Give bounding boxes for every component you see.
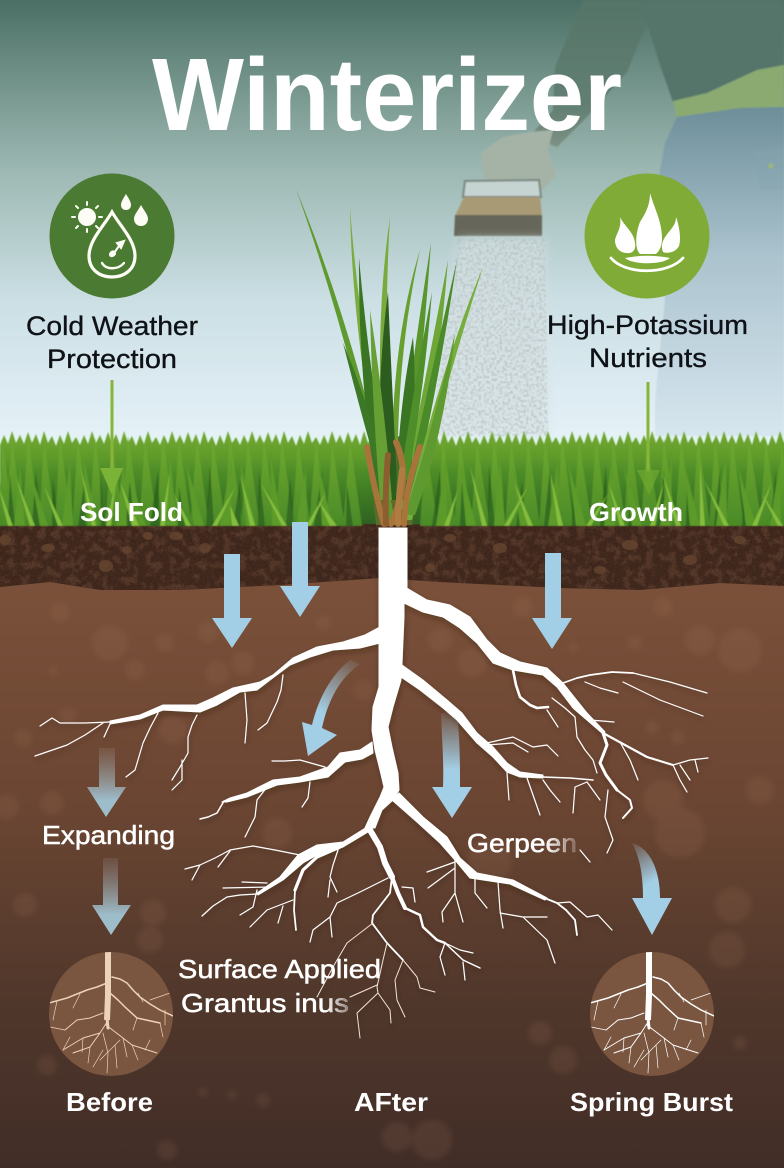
farmer waistband xyxy=(673,65,784,118)
lawn grass xyxy=(0,431,784,526)
label: cold weather protection: Protection xyxy=(47,344,177,374)
arrow: lower right xyxy=(632,843,672,935)
label: surface applied granules: Grantus inus xyxy=(181,988,349,1018)
sky background xyxy=(0,0,784,530)
icon: high-potassium nutrients xyxy=(584,174,710,298)
before root circle xyxy=(49,952,173,1076)
label: gerpeen: Gerpeen xyxy=(467,828,577,858)
soil blotches xyxy=(0,597,774,1160)
fine roots xyxy=(35,673,708,980)
plant base stems xyxy=(368,436,425,525)
label: high-potassium nutrients: Nutrients xyxy=(589,343,707,373)
farmer trousers xyxy=(655,107,784,436)
label: high-potassium nutrients: High-Potassium xyxy=(547,310,748,340)
arrow: curved toward root xyxy=(302,660,360,756)
icon: small drops xyxy=(121,194,148,226)
icon: sprout and smile xyxy=(102,241,124,268)
spreader hopper xyxy=(454,197,542,236)
icon: large water drop xyxy=(89,212,135,277)
medium branches xyxy=(370,830,392,877)
trouser pocket xyxy=(752,146,784,190)
arrow: faded left upper xyxy=(87,748,126,817)
green arrow: high-potassium nutrients xyxy=(637,382,660,495)
icon: bowl xyxy=(625,256,670,263)
spreader handle xyxy=(463,180,541,197)
farmer figure in background xyxy=(454,0,784,436)
root system xyxy=(35,528,708,1038)
arrow: topsoil left xyxy=(212,554,252,648)
icon: flames xyxy=(615,193,680,254)
topsoil layer xyxy=(0,520,784,590)
arrow: topsoil right xyxy=(532,553,572,649)
label: surface applied granules: Surface Applied xyxy=(178,954,381,984)
soil clods xyxy=(0,532,746,574)
label: expanding: Expanding xyxy=(42,820,175,850)
label: growth: Growth xyxy=(589,497,683,527)
arrow: faded left lower xyxy=(92,858,131,935)
farmer arm xyxy=(530,0,647,147)
farmer shirt xyxy=(640,0,784,102)
label: sol fold: Sol Fold xyxy=(80,497,183,527)
icon: sun xyxy=(72,202,102,232)
icon: cold weather protection xyxy=(50,174,174,298)
label: before: Before xyxy=(66,1087,153,1117)
granule spray xyxy=(428,238,549,436)
spring burst root circle xyxy=(590,952,714,1076)
green arrow: cold weather protection xyxy=(100,380,123,495)
plant blades xyxy=(296,189,396,525)
label: high-potassium nutrients xyxy=(547,310,748,373)
title: Winterizer xyxy=(152,37,622,152)
taproot and thick branches xyxy=(110,528,605,900)
label: cold weather protection xyxy=(26,311,198,374)
blue arrows through soil xyxy=(87,522,672,935)
label: after: AFter xyxy=(354,1087,428,1117)
plant brown stems xyxy=(367,442,420,524)
lower soil layer xyxy=(0,575,784,1168)
thin faded roots xyxy=(317,923,435,1038)
arrow: topsoil centre xyxy=(280,522,320,617)
arrow: curved deep centre xyxy=(432,712,472,818)
label: spring burst: Spring Burst xyxy=(570,1087,733,1117)
label: surface applied granules xyxy=(178,954,381,1018)
farmer hand xyxy=(481,130,556,190)
tall central grass plant xyxy=(296,189,483,525)
label: cold weather protection: Cold Weather xyxy=(26,311,198,341)
